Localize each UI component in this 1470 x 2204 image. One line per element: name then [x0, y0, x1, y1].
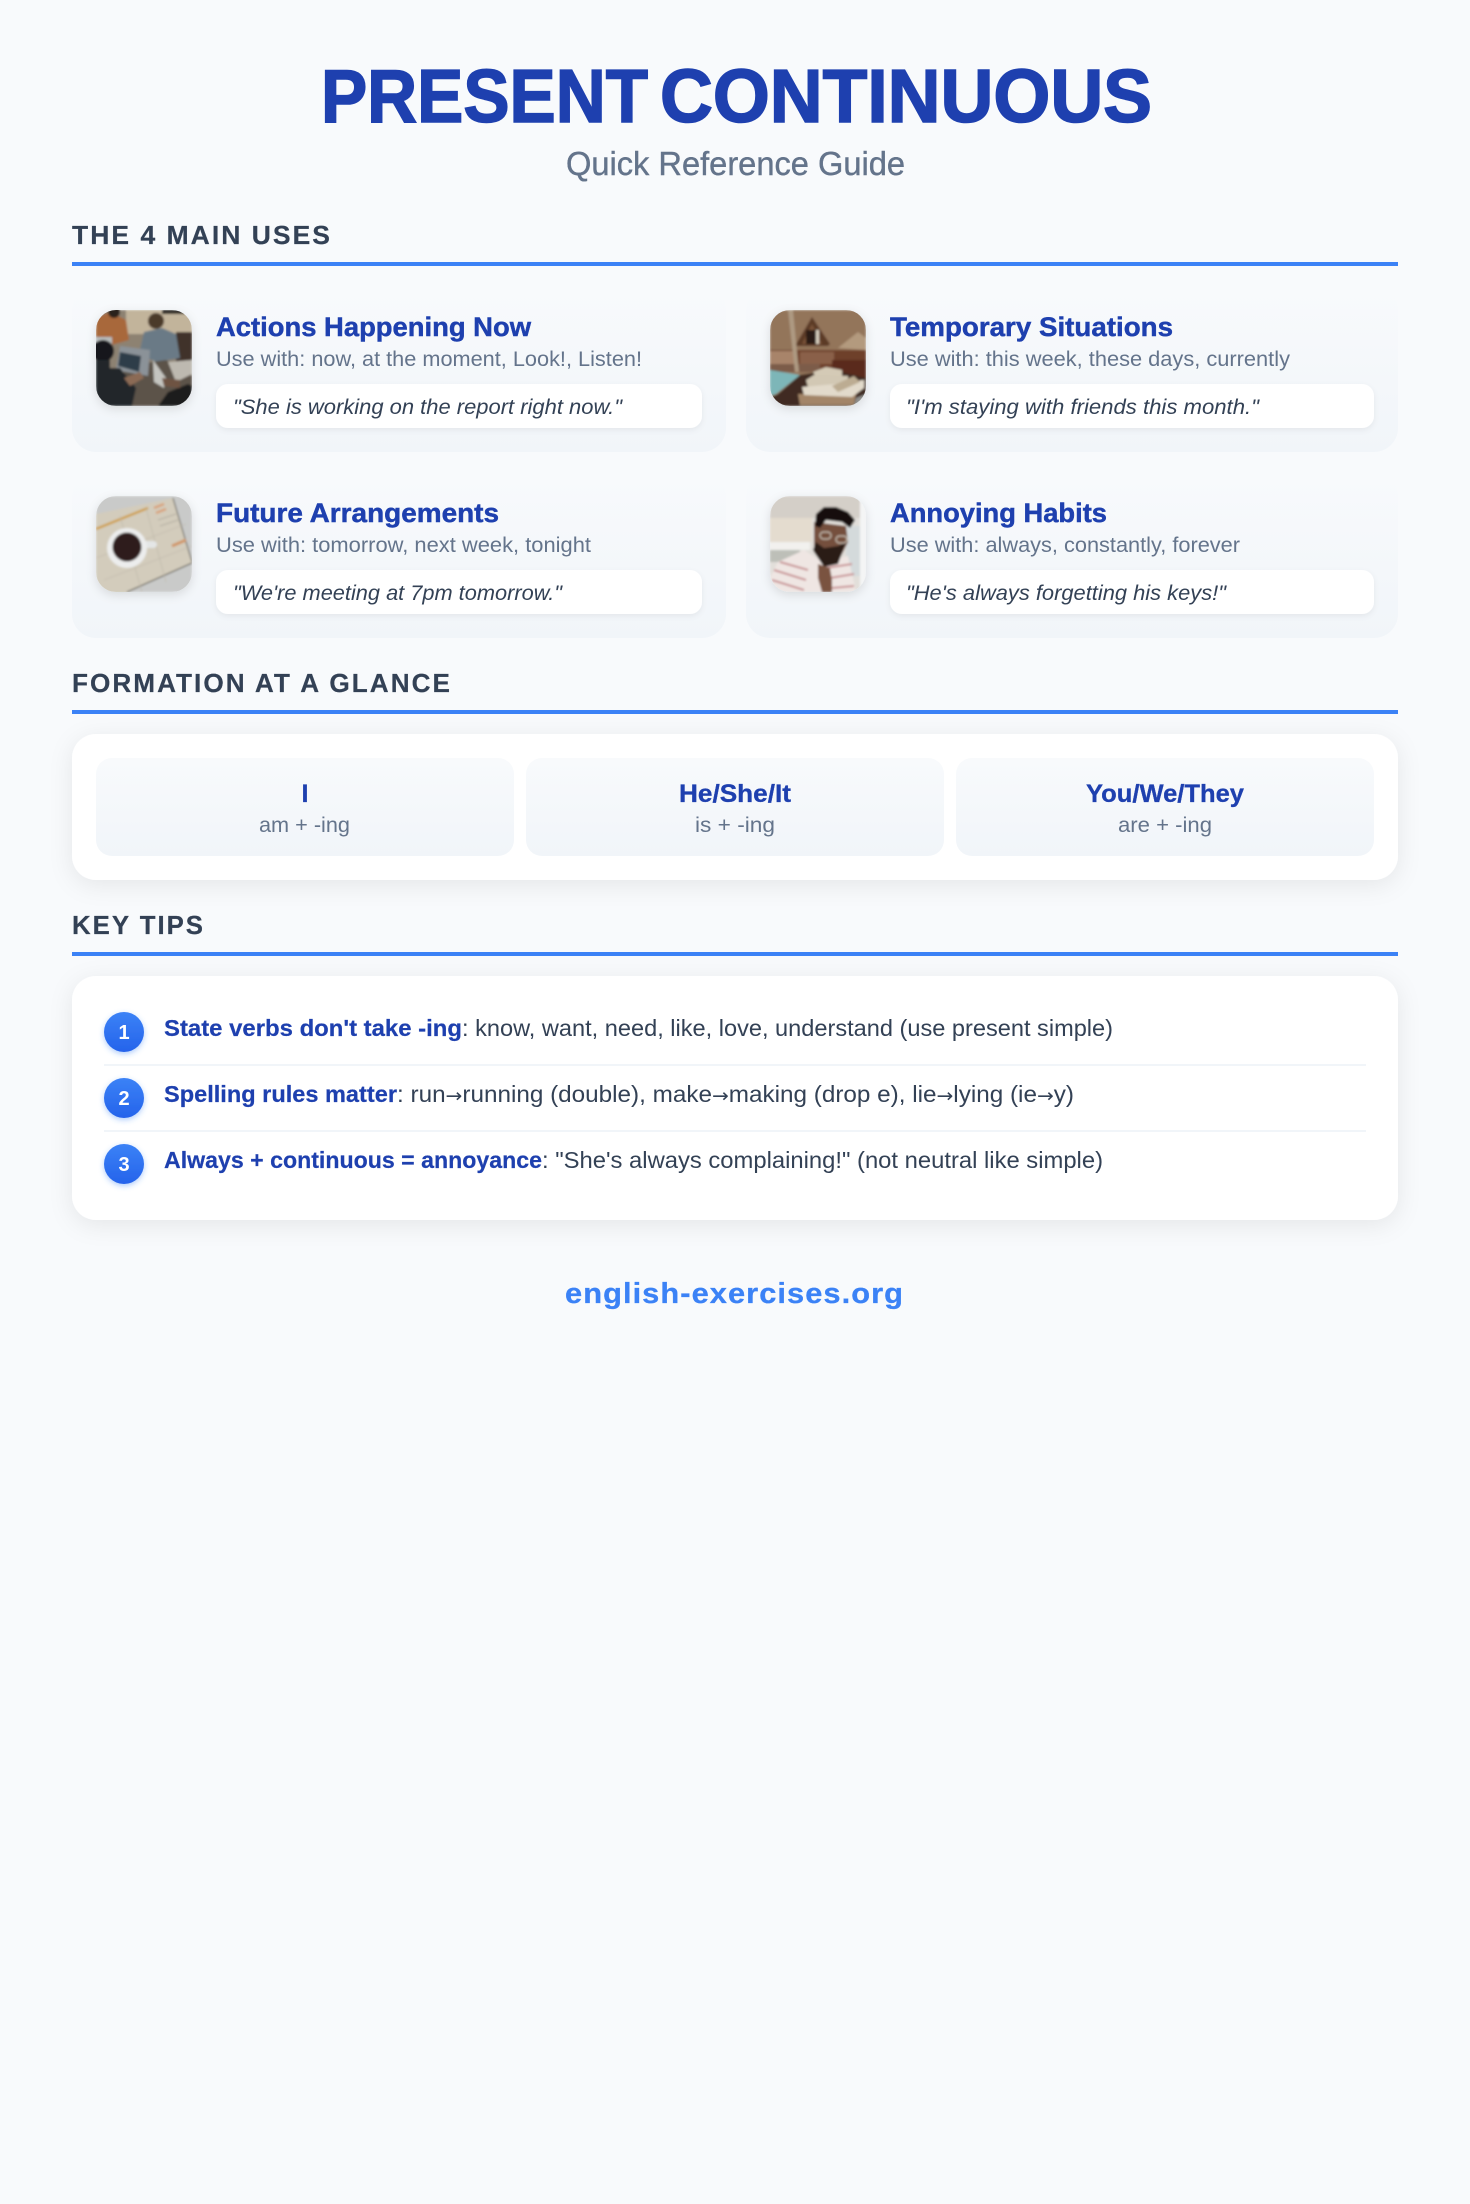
signal words: Use with: always, constantly, forever	[890, 534, 1240, 557]
panel: actions happening now	[90, 310, 704, 434]
example box: "He's always forgetting his keys!"	[906, 582, 1228, 605]
heading: formation at a glance: FORMATION AT A GLANCE	[72, 668, 452, 698]
tip 3	[104, 1144, 1103, 1184]
card title: Temporary Situations	[890, 312, 1173, 342]
example box	[890, 384, 1374, 428]
icon: office team photo	[92, 306, 192, 406]
example box	[216, 570, 702, 614]
formation: I: I	[302, 780, 308, 808]
card title: Future Arrangements	[216, 498, 499, 528]
formation: he she it: is + -ing	[695, 814, 775, 837]
card title: Actions Happening Now	[216, 312, 532, 342]
panel: formation table	[72, 734, 1398, 880]
tip 3: Always + continuous = annoyance	[164, 1147, 542, 1173]
heading: the 4 main uses: THE 4 MAIN USES	[72, 220, 332, 250]
tip 1	[104, 1012, 1113, 1052]
title: PRESENT	[321, 54, 648, 138]
tip 2: Spelling rules matter	[164, 1081, 397, 1107]
tip 1: 1	[118, 1022, 130, 1044]
panel: temporary situations	[764, 310, 1376, 434]
signal words: Use with: now, at the moment, Look!, Listen!	[216, 348, 642, 371]
formation: you we they: are + -ing	[1118, 814, 1212, 837]
formation: you we they: You/We/They	[1086, 780, 1244, 808]
tip 3: : "She's always complaining!" (not neutral like simple)	[542, 1147, 1103, 1173]
icon: lodge photo	[770, 310, 866, 406]
title	[321, 54, 1152, 138]
example box	[890, 570, 1374, 614]
tip 2: 2	[118, 1088, 130, 1110]
formation: I: am + -ing	[259, 814, 350, 837]
tip 1: : know, want, need, like, love, understand (use present simple)	[462, 1015, 1113, 1041]
formation: I	[96, 758, 514, 856]
example box: "She is working on the report right now."	[233, 396, 624, 419]
subtitle: Quick Reference Guide	[566, 145, 905, 182]
panel: annoying habits	[764, 496, 1376, 620]
signal words: Use with: this week, these days, currently	[890, 348, 1291, 371]
tip 3: 3	[118, 1154, 130, 1176]
heading: key tips: KEY TIPS	[72, 910, 205, 940]
formation: you we they	[956, 758, 1374, 856]
icon: coffee and planner photo	[96, 496, 192, 593]
signal words: Use with: tomorrow, next week, tonight	[216, 534, 591, 557]
example box	[216, 384, 702, 428]
formation: he she it: He/She/It	[679, 780, 792, 808]
card title: Annoying Habits	[890, 498, 1107, 528]
icon: man portrait photo	[770, 496, 866, 592]
footer: website: english-exercises.org	[565, 1278, 904, 1310]
tip 2: : run→running (double), make →making (drop e), lie →lying (ie→y)	[397, 1081, 1074, 1107]
tip 1: State verbs don't take -ing	[164, 1015, 462, 1041]
formation: he she it	[526, 758, 944, 856]
example box: "I'm staying with friends this month."	[906, 396, 1261, 419]
title: CONTINUOUS	[660, 54, 1152, 138]
panel: future arrangements	[90, 496, 704, 620]
panel: key tips	[72, 976, 1398, 1220]
tip 2	[104, 1078, 1074, 1118]
example box: "We're meeting at 7pm tomorrow."	[233, 582, 564, 605]
